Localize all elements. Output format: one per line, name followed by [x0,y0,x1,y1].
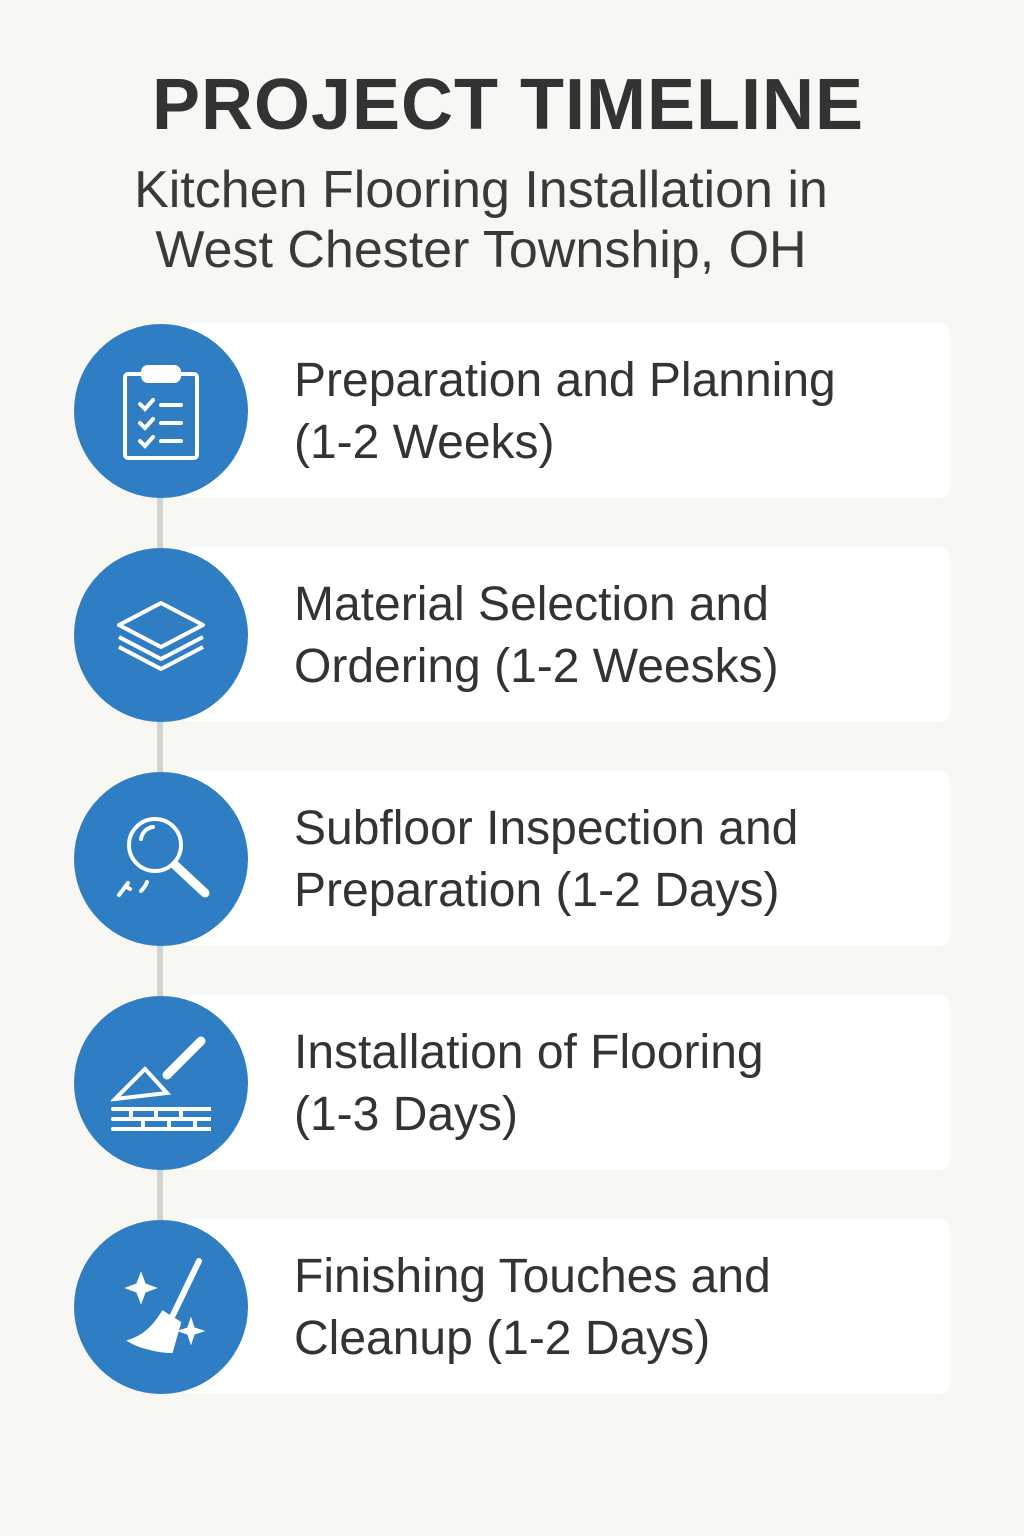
card: step 1: Preparation and Planning [294,354,836,407]
icon: clipboard [74,324,248,498]
icon: broom [74,1220,248,1394]
card: step 2: Ordering (1-2 Weesks) [294,640,779,693]
icon: magnifier [74,772,248,946]
card: step 3 [180,771,950,946]
subtitle: West Chester Township, OH [155,221,807,279]
card: step 5: Cleanup (1-2 Days) [294,1312,710,1365]
icon: trowel and tiles [74,996,248,1170]
subtitle [134,161,828,279]
card: step 5: Finishing Touches and [294,1250,771,1303]
card: step 5 [180,1219,950,1394]
card: step 2 [180,547,950,722]
card: step 1: (1-2 Weeks) [294,416,555,469]
subtitle: Kitchen Flooring Installation in [134,161,828,219]
connector line [157,411,163,1307]
card: step 4: (1-3 Days) [294,1088,518,1141]
card: step 3: Subfloor Inspection and [294,802,798,855]
card: step 1 [180,323,950,498]
card: step 2: Material Selection and [294,578,769,631]
title: PROJECT TIMELINE [152,65,864,145]
card: step 4: Installation of Flooring [294,1026,764,1079]
card: step 4 [180,995,950,1170]
icon: layers [74,548,248,722]
card: step 3: Preparation (1-2 Days) [294,864,780,917]
